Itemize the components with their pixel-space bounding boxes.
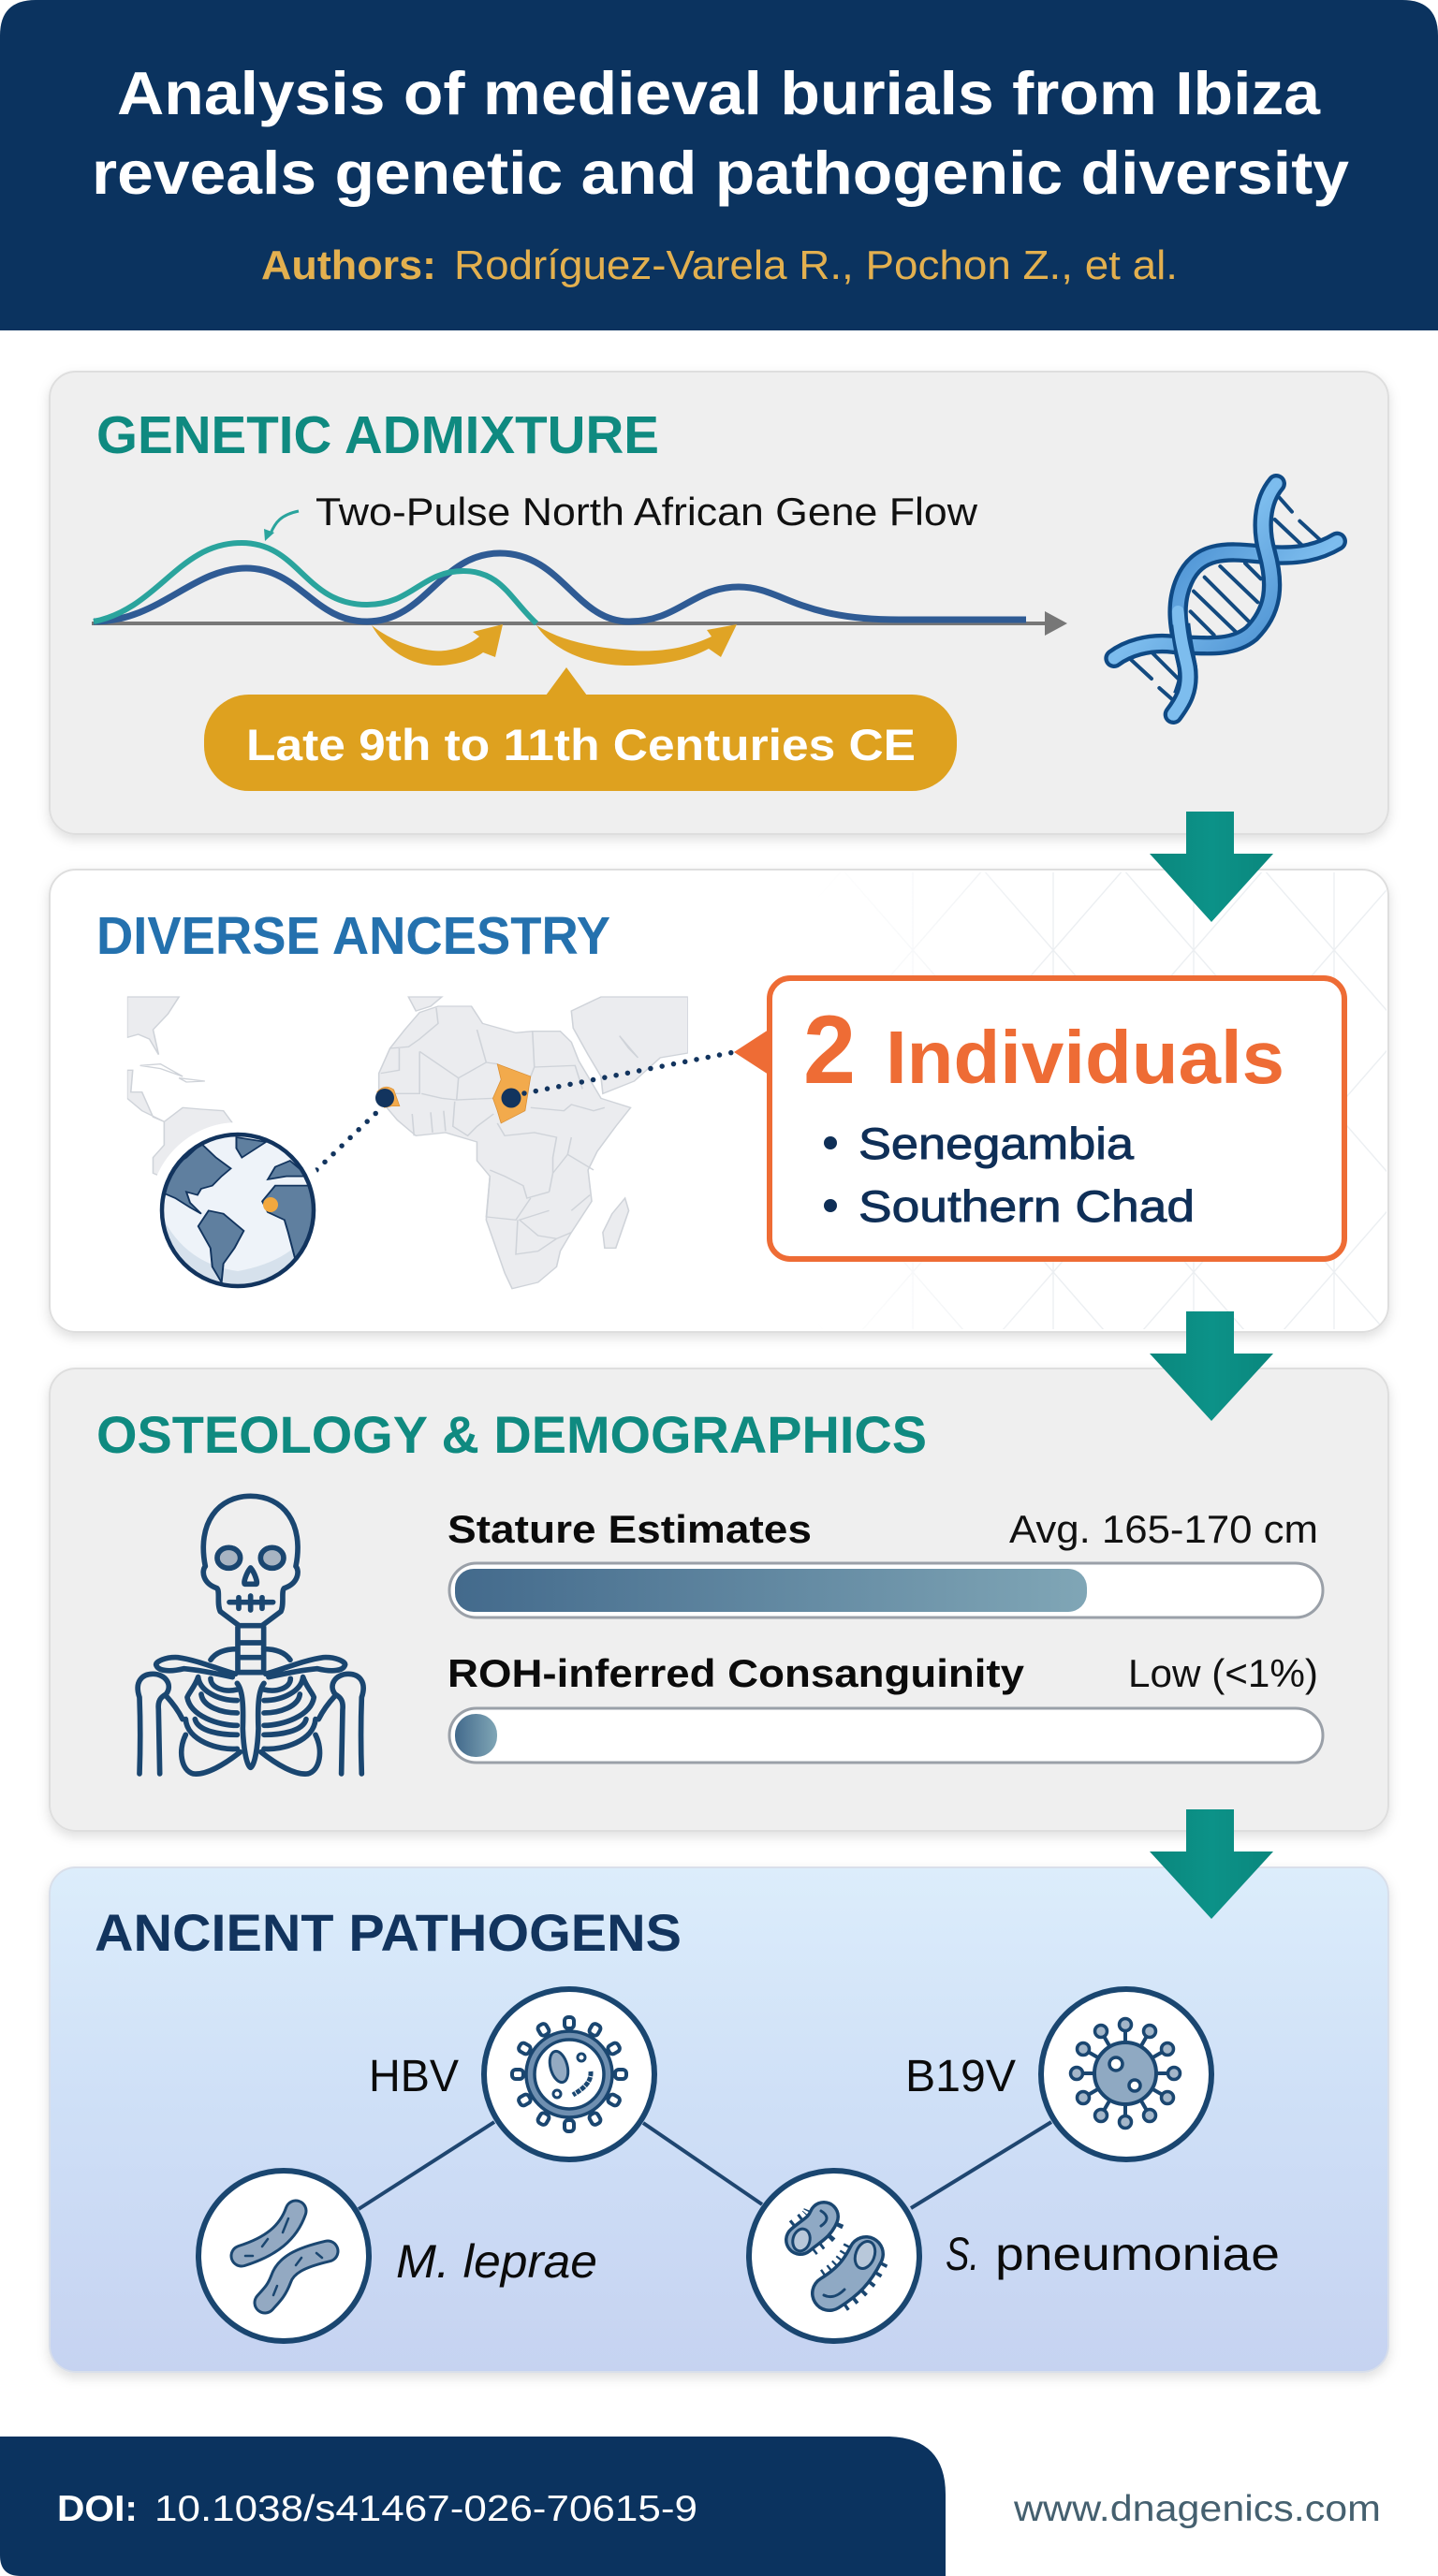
node: M. leprae xyxy=(198,2171,597,2341)
icon: spiky bacteria xyxy=(790,2211,879,2297)
panel: osteology and demographics xyxy=(50,1368,1388,1831)
bullet list xyxy=(824,1119,1195,1231)
consanguinity bar xyxy=(448,1651,1323,1763)
bullet list: Senegambia xyxy=(858,1119,1135,1168)
icon: skeleton xyxy=(138,1496,363,1774)
stature bar xyxy=(448,1507,1323,1617)
bullet list: Southern Chad xyxy=(858,1181,1195,1231)
title xyxy=(92,59,1349,207)
dotted connectors xyxy=(316,1052,734,1170)
highlight: senegambia and chad xyxy=(377,1064,531,1123)
website: www.dnagenics.com xyxy=(1013,2489,1381,2529)
heading: genetic admixture: GENETIC ADMIXTURE xyxy=(96,405,659,465)
authors: Authors: xyxy=(261,242,436,288)
heading: osteology: OSTEOLOGY & DEMOGRAPHICS xyxy=(96,1405,927,1464)
icon: hepatitis B virus xyxy=(512,2017,626,2131)
individuals label: Individuals xyxy=(886,1016,1284,1099)
location dots xyxy=(375,1088,521,1108)
panel: genetic admixture xyxy=(50,372,1388,834)
teal wave xyxy=(94,543,536,623)
consanguinity bar: ROH-inferred Consanguinity xyxy=(448,1651,1025,1695)
footer xyxy=(0,2437,1381,2576)
doi: 10.1038/s41467-026-70615-9 xyxy=(154,2489,697,2529)
heading: diverse ancestry: DIVERSE ANCESTRY xyxy=(96,906,610,966)
node: HBV: HBV xyxy=(369,2052,459,2101)
stature bar: Avg. 165-170 cm xyxy=(1009,1507,1318,1551)
arrow: osteology to pathogens xyxy=(1150,1809,1273,1919)
node: HBV xyxy=(369,1989,654,2159)
node: S. pneumoniae: pneumoniae xyxy=(995,2228,1280,2280)
arrow: admixture to ancestry xyxy=(1150,812,1273,922)
node: B19V xyxy=(905,1989,1211,2159)
title: reveals genetic and pathogenic diversity xyxy=(92,139,1349,207)
node: S. pneumoniae xyxy=(749,2171,1280,2341)
consanguinity bar: Low (<1%) xyxy=(1128,1651,1318,1695)
date pill: Late 9th to 11th Centuries CE xyxy=(246,720,916,769)
date pill xyxy=(204,667,957,791)
world map xyxy=(127,997,688,1289)
icon: dna helix xyxy=(1114,484,1337,714)
gene flow label: Two-Pulse North African Gene Flow xyxy=(315,490,978,534)
heading: pathogens: ANCIENT PATHOGENS xyxy=(95,1903,682,1962)
panel: ancient pathogens xyxy=(50,1867,1388,2372)
icon: globe xyxy=(157,1122,317,1288)
gold pulse arrows xyxy=(372,624,737,666)
globe marker xyxy=(263,1197,278,1212)
arrow: ancestry to osteology xyxy=(1150,1311,1273,1421)
node: B19V: B19V xyxy=(905,2052,1016,2101)
node: S. pneumoniae: S. xyxy=(946,2228,979,2280)
icon: rod bacteria xyxy=(242,2211,328,2303)
authors: Rodríguez-Varela R., Pochon Z., et al. xyxy=(454,242,1178,288)
callout: 2 individuals xyxy=(734,978,1344,1259)
panel: diverse ancestry xyxy=(50,870,1388,1332)
dark blue wave xyxy=(94,553,1026,622)
connector lines xyxy=(359,2122,1051,2209)
big number: 2 xyxy=(803,996,856,1105)
icon: parvovirus xyxy=(1071,2018,1180,2129)
node: M. leprae: M. leprae xyxy=(396,2235,597,2288)
teal callout arrow xyxy=(264,511,299,541)
timeline axis xyxy=(92,611,1067,636)
wave chart xyxy=(92,511,1067,636)
stature bar: Stature Estimates xyxy=(448,1507,812,1551)
doi: DOI: xyxy=(57,2489,138,2529)
title: Analysis of medieval burials from Ibiza xyxy=(117,59,1321,127)
header banner xyxy=(0,0,1438,330)
